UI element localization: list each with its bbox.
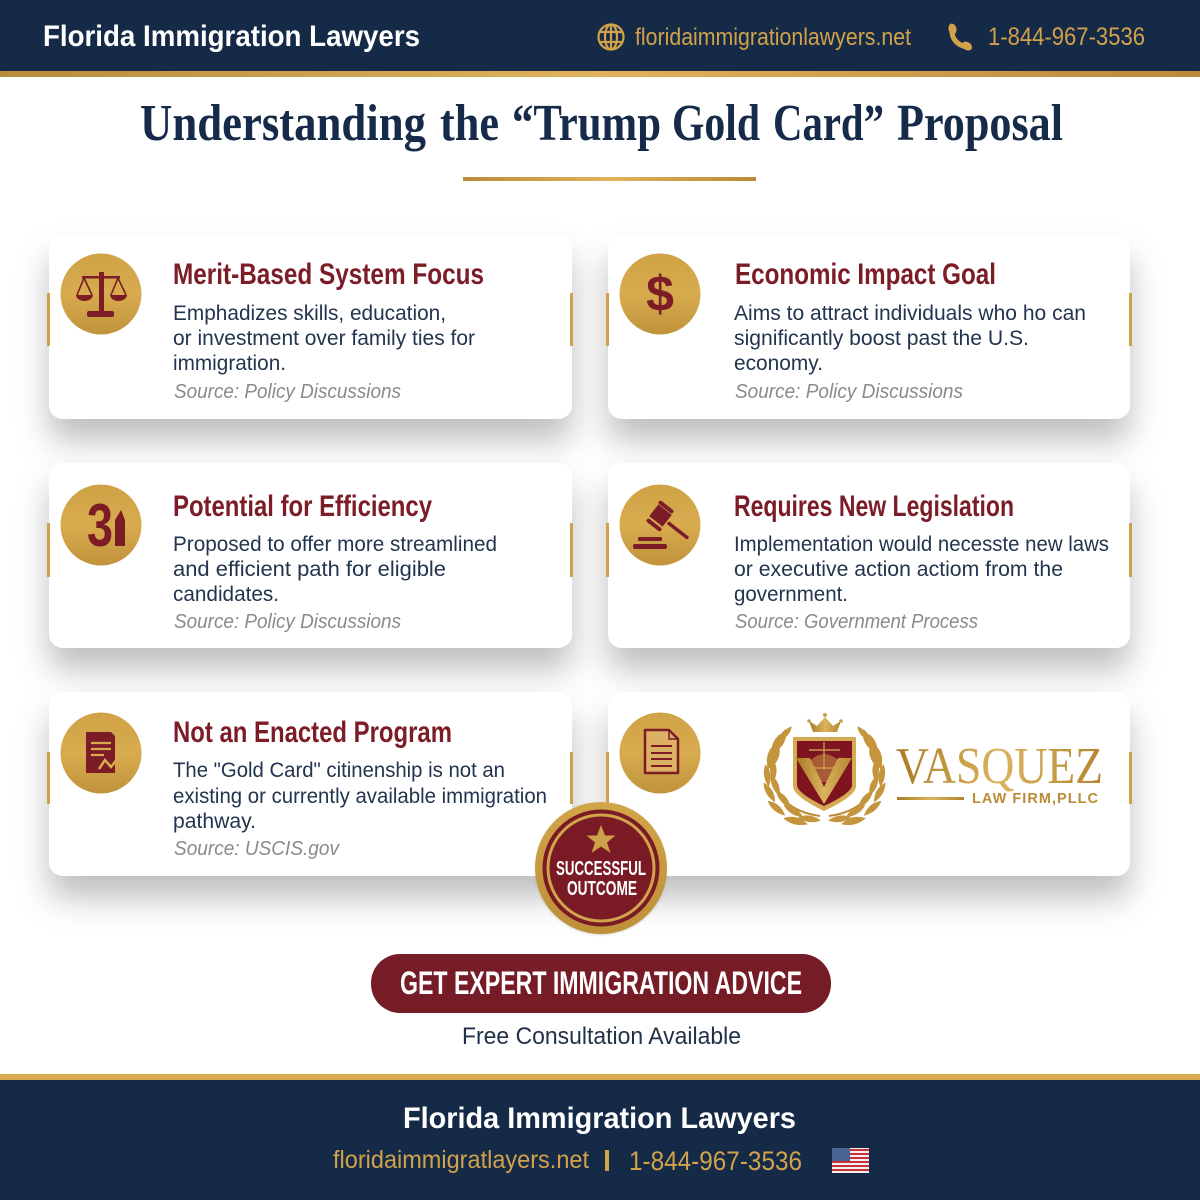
title: Card” — [773, 95, 884, 152]
title: Gold — [672, 95, 760, 152]
description — [734, 301, 1086, 375]
logo: firm suffix: LAW FIRM,PLLC — [972, 791, 1099, 807]
description: candidates. — [173, 582, 279, 606]
source: Source: Policy Discussions — [174, 381, 401, 403]
source: Source: Policy Discussions — [174, 611, 401, 633]
badge text: SUCCESSFUL — [556, 858, 646, 880]
icon: gavel — [620, 484, 700, 566]
description: economy. — [734, 351, 823, 375]
call to action button: GET EXPERT IMMIGRATION ADVICE — [400, 965, 802, 1001]
panel: not an enacted program — [47, 692, 573, 876]
source: Source: Government Process — [735, 611, 978, 633]
header bar — [0, 0, 1200, 77]
call to action button — [371, 954, 831, 1013]
source: Source: USCIS.gov — [174, 838, 340, 860]
description: existing or currently available immigration — [173, 784, 547, 808]
badge text — [556, 858, 646, 900]
description: government. — [734, 582, 848, 606]
header firm name: Florida Immigration Lawyers — [43, 20, 420, 53]
description: immigration. — [173, 351, 286, 375]
title: “Trump — [512, 95, 661, 152]
badge text: OUTCOME — [567, 878, 637, 900]
panel: requires new legislation — [606, 463, 1132, 648]
description: The "Gold Card" citinenship is not an — [173, 758, 505, 782]
description — [734, 532, 1109, 606]
icon: dollar sign — [620, 254, 700, 334]
footer bar — [0, 1074, 1200, 1200]
icon: telephone — [947, 23, 974, 52]
logo: laurel crest — [761, 713, 888, 827]
description: significantly boost past the U.S. — [734, 326, 1029, 350]
footer separator — [605, 1150, 609, 1171]
heading: Requires New Legislation — [734, 490, 1014, 523]
free consultation note: Free Consultation Available — [462, 1023, 741, 1050]
description: Aims to attract individuals who ho can — [734, 301, 1086, 325]
icon: dollar sign: $ — [646, 266, 674, 322]
title underline — [463, 177, 756, 181]
header website: floridaimmigrationlawyers.net — [635, 24, 911, 51]
logo: firm name: VASQUEZ — [896, 738, 1103, 795]
description: Proposed to offer more streamlined — [173, 532, 497, 556]
title: Understanding — [140, 95, 426, 152]
icon: document — [620, 712, 700, 794]
description — [173, 301, 475, 375]
icon: scales of justice — [60, 254, 142, 334]
icon: star — [586, 825, 616, 853]
panel: economic impact goal — [606, 234, 1132, 419]
logo: rule — [897, 797, 964, 800]
panel: merit-based system focus — [47, 234, 573, 419]
heading: Potential for Efficiency — [173, 490, 432, 523]
icon: american flag — [832, 1148, 869, 1173]
heading: Economic Impact Goal — [735, 258, 996, 291]
description: pathway. — [173, 809, 256, 833]
heading: Merit-Based System Focus — [173, 258, 484, 291]
heading: Not an Enacted Program — [173, 716, 452, 749]
icon: numeral with rising arrow — [60, 484, 142, 566]
icon: document with signature — [60, 712, 142, 794]
title: the — [440, 95, 499, 152]
description — [173, 532, 497, 606]
footer firm name: Florida Immigration Lawyers — [403, 1102, 796, 1135]
source: Source: Policy Discussions — [735, 381, 963, 403]
description — [173, 758, 547, 833]
description: Implementation would necesste new laws — [734, 532, 1109, 556]
panel: potential for efficiency — [47, 463, 573, 648]
icon: numeral with rising arrow: 3 — [87, 492, 113, 559]
footer phone: 1-844-967-3536 — [629, 1146, 802, 1176]
description: and efficient path for eligible — [173, 557, 446, 581]
badge: successful outcome — [535, 802, 667, 934]
description: or investment over family ties for — [173, 326, 475, 350]
header phone: 1-844-967-3536 — [988, 23, 1145, 51]
footer website: floridaimmigratlayers.net — [333, 1146, 589, 1174]
panel: law firm logo — [606, 692, 1132, 876]
icon: globe — [598, 24, 624, 50]
title: Proposal — [897, 95, 1063, 152]
description: Emphadizes skills, education, — [173, 301, 446, 325]
description: or executive action actiom from the — [734, 557, 1063, 581]
